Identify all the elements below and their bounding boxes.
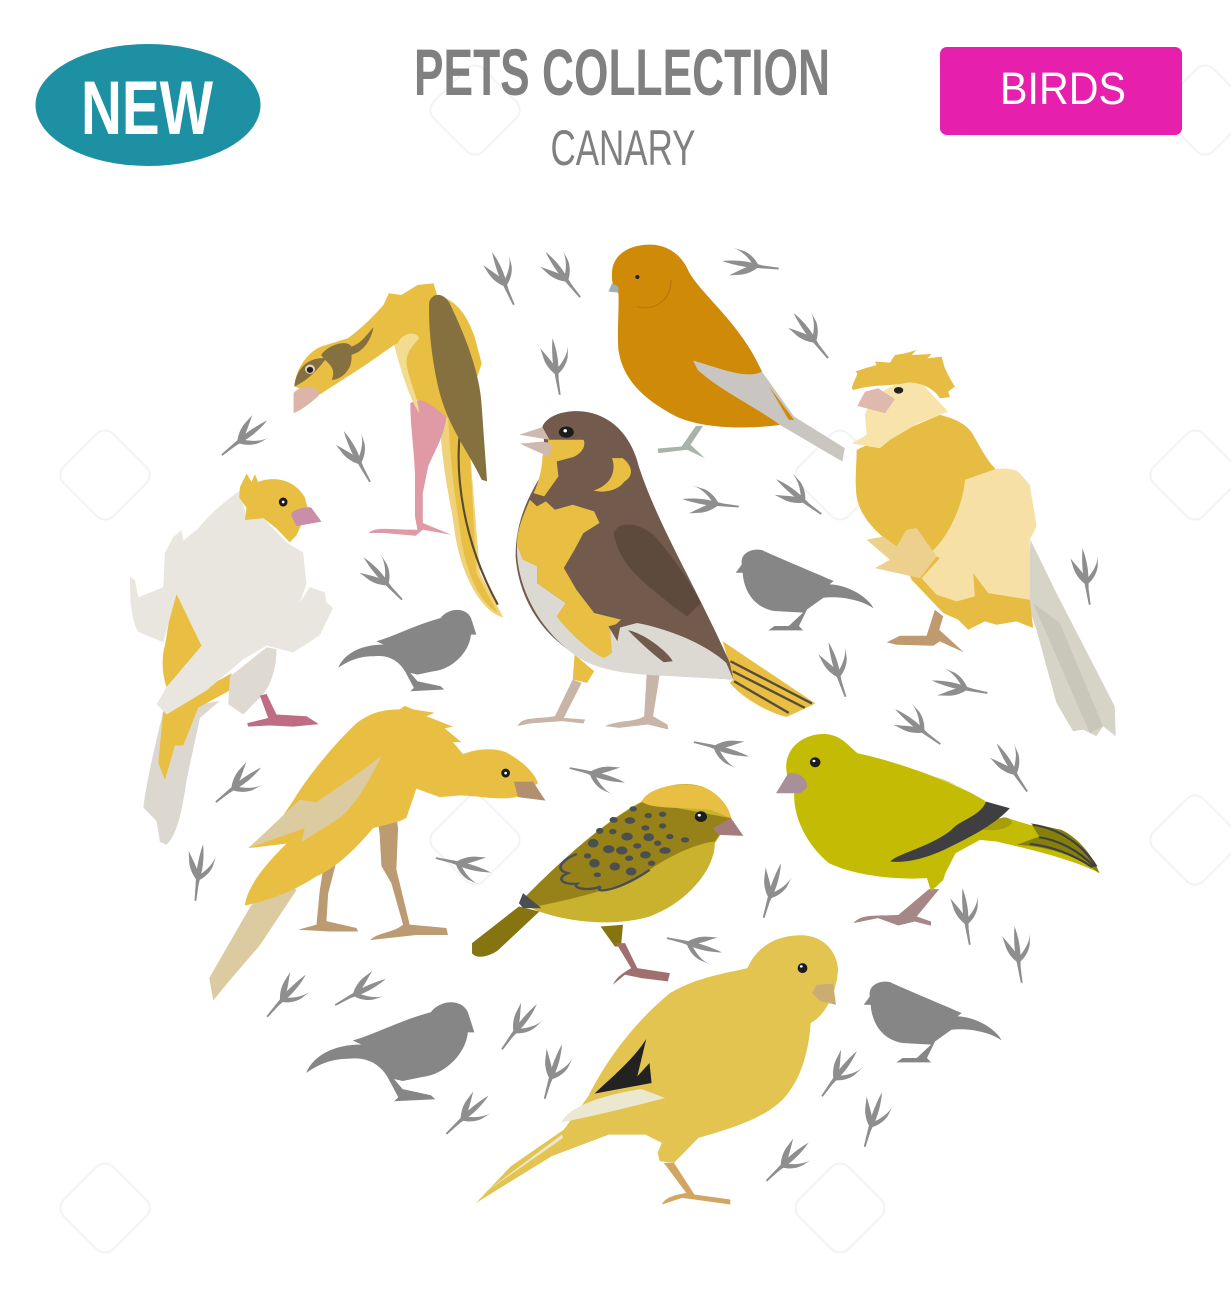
category button: BIRDS: BIRDS xyxy=(1000,63,1126,114)
bird: frilled yellow canary xyxy=(852,350,1116,736)
bird: gibber canary with pink legs xyxy=(294,283,503,617)
bird: olive spotted canary xyxy=(472,784,743,985)
badge: NEW: NEW xyxy=(81,66,213,151)
bird: orange canary xyxy=(608,245,845,461)
bird: white frilled canary xyxy=(130,473,333,845)
silhouette bird: lower right xyxy=(864,982,1002,1062)
bird: mottled brown and yellow canary xyxy=(516,411,816,730)
silhouette bird: middle left xyxy=(338,610,476,691)
title: PETS COLLECTION xyxy=(414,35,830,109)
bird: yellow canary xyxy=(476,935,838,1205)
silhouette bird: middle right xyxy=(736,550,874,630)
bird: hunched yellow canary xyxy=(209,706,546,1000)
icons: bird footprints xyxy=(180,243,1102,1191)
bird: green canary xyxy=(776,734,1100,926)
silhouette bird: lower left xyxy=(306,1002,474,1101)
badge: NEW xyxy=(36,44,260,166)
subtitle: CANARY xyxy=(550,120,696,176)
category button: BIRDS xyxy=(940,47,1182,135)
